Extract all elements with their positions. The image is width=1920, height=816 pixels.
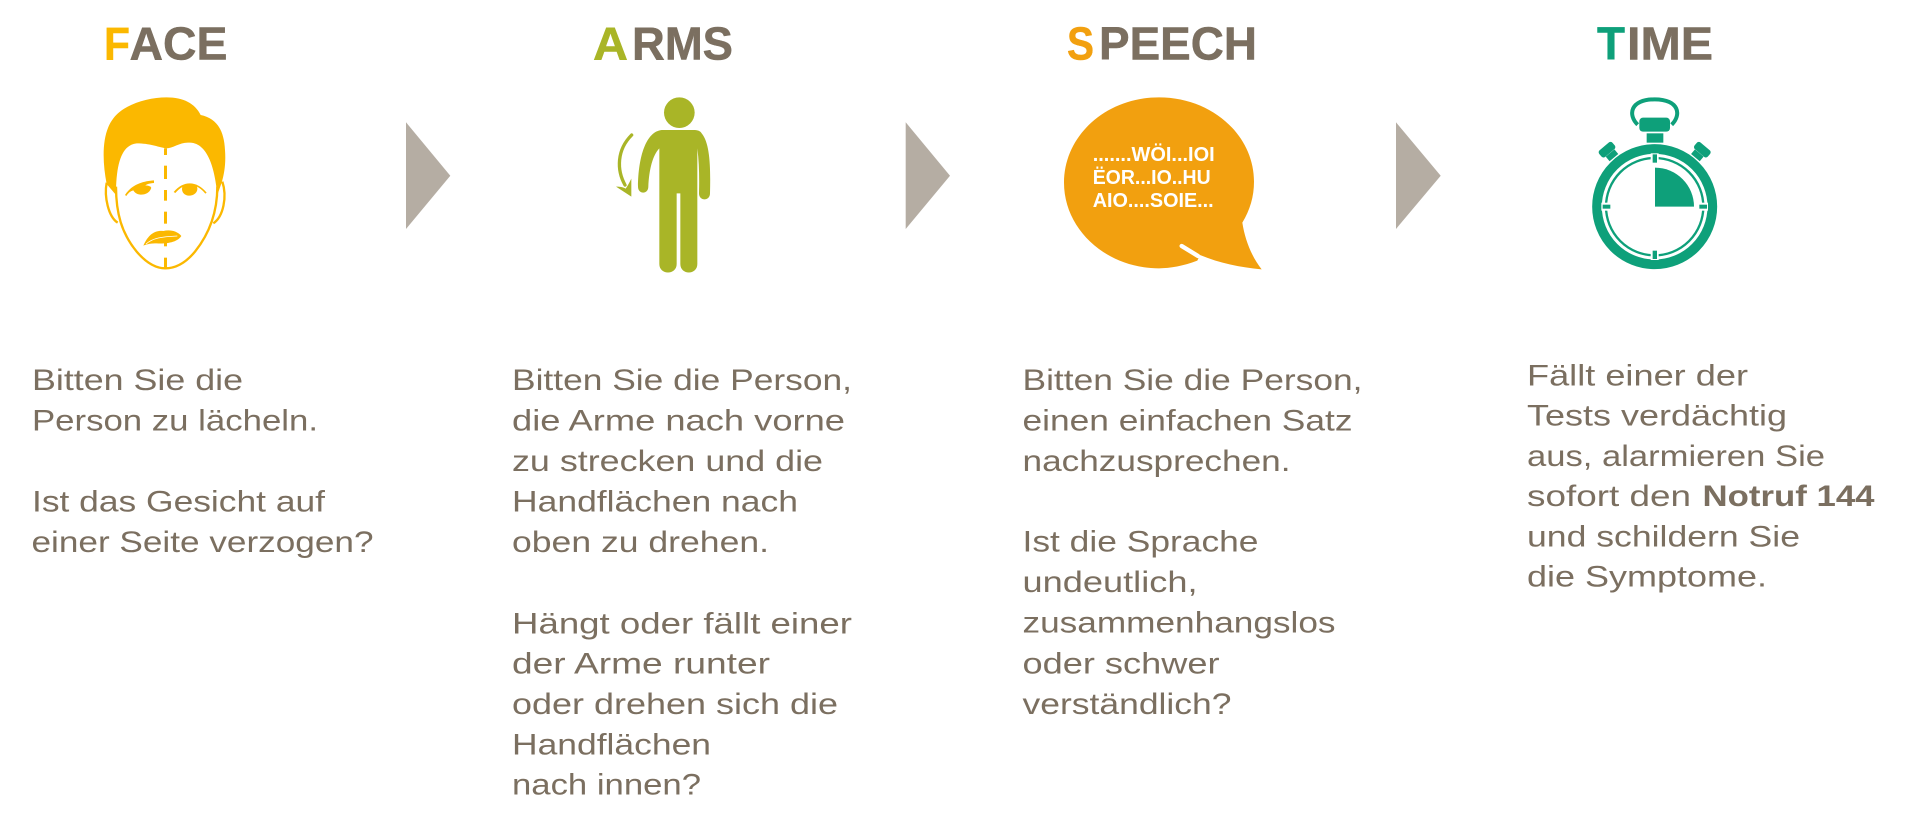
- text: arms instructions: zu strecken und die: [512, 445, 823, 478]
- text: arms instructions: oben zu drehen.: [512, 526, 769, 559]
- text: arms instructions: nach innen?: [512, 769, 701, 802]
- text: face instructions: Bitten Sie die: [32, 364, 243, 397]
- text: speech instructions: [1022, 364, 1362, 721]
- text: face instructions: Ist das Gesicht auf: [32, 486, 326, 518]
- text: speech instructions: nachzusprechen.: [1022, 445, 1290, 478]
- text: arms instructions: Bitten Sie die Person,: [512, 364, 852, 397]
- panel: face: [104, 18, 228, 268]
- text: arms instructions: Hängt oder fällt einer: [512, 607, 852, 640]
- text: time instructions: Fällt einer der: [1527, 360, 1748, 393]
- text: time instructions: die Symptome.: [1527, 561, 1767, 594]
- icon: stopwatch: [1597, 99, 1712, 264]
- heading: ARMS: RMS: [632, 18, 733, 70]
- heading: FACE: F: [104, 18, 130, 70]
- panel: arms: [593, 18, 733, 272]
- icon: speech bubble: ËOR...IO..HU: [1093, 166, 1211, 189]
- panel: time: [1597, 18, 1713, 264]
- icon: speech bubble: AIO....SOIE...: [1093, 190, 1214, 212]
- text: speech instructions: zusammenhangslos: [1022, 607, 1336, 640]
- text: arms instructions: der Arme runter: [512, 648, 770, 680]
- arrow 3: [1396, 122, 1441, 229]
- text: time instructions: und schildern Sie: [1527, 520, 1800, 553]
- text: face instructions: Person zu lächeln.: [32, 404, 318, 438]
- text: time instructions: Notruf 144: [1702, 480, 1875, 513]
- heading: FACE: ACE: [130, 18, 228, 70]
- text: arms instructions: oder drehen sich die: [512, 688, 838, 721]
- text: speech instructions: undeutlich,: [1022, 566, 1198, 599]
- arrow 2: [906, 122, 950, 229]
- text: arms instructions: Handflächen: [512, 728, 711, 761]
- heading: TIME: IME: [1627, 18, 1713, 70]
- text: arms instructions: [512, 364, 852, 802]
- text: face instructions: einer Seite verzogen?: [32, 526, 374, 559]
- heading: SPEECH: S: [1067, 18, 1094, 70]
- heading: TIME: T: [1597, 18, 1625, 70]
- text: speech instructions: einen einfachen Satz: [1022, 404, 1352, 438]
- text: time instructions: sofort den: [1527, 480, 1691, 513]
- icon: speech bubble: [1064, 97, 1262, 269]
- text: time instructions: [1527, 360, 1875, 594]
- panel: speech: [1064, 18, 1262, 269]
- heading: ARMS: A: [593, 18, 628, 70]
- text: speech instructions: Bitten Sie die Person,: [1022, 364, 1362, 397]
- text: speech instructions: verständlich?: [1022, 688, 1232, 721]
- text: speech instructions: oder schwer: [1022, 647, 1220, 680]
- text: arms instructions: Handflächen nach: [512, 486, 798, 518]
- icon: face with drooping side: [104, 97, 225, 268]
- icon: speech bubble: .......WÖI...IOI: [1093, 143, 1215, 166]
- text: arms instructions: die Arme nach vorne: [512, 404, 845, 438]
- text: face instructions: [32, 364, 374, 559]
- icon: person with falling arm: [616, 97, 710, 272]
- text: speech instructions: Ist die Sprache: [1022, 526, 1258, 559]
- heading: SPEECH: PEECH: [1099, 18, 1257, 70]
- text: time instructions: Tests verdächtig: [1527, 400, 1787, 433]
- text: time instructions: aus, alarmieren Sie: [1527, 440, 1825, 473]
- arrow 1: [406, 122, 450, 229]
